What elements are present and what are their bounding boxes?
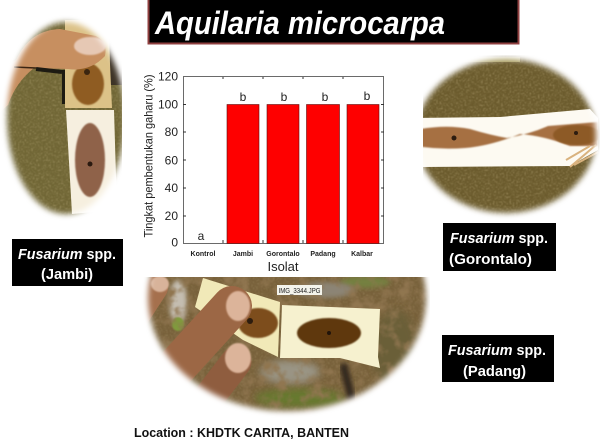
bar chart bbox=[142, 70, 384, 274]
label: Gorontalo bbox=[443, 223, 556, 271]
label: Jambi: (Jambi) bbox=[41, 266, 93, 283]
y axis numbers: 40 bbox=[165, 181, 178, 195]
y axis numbers: 120 bbox=[158, 70, 178, 84]
label: Gorontalo: Fusarium spp. bbox=[450, 230, 548, 247]
significance letters: b bbox=[364, 89, 371, 103]
significance letters: a bbox=[198, 229, 205, 243]
label: Padang: Fusarium spp. bbox=[448, 342, 546, 359]
label: Gorontalo: (Gorontalo) bbox=[449, 251, 532, 268]
y axis numbers: 80 bbox=[165, 125, 178, 139]
chart plot frame bbox=[184, 76, 384, 244]
label: Jambi bbox=[12, 239, 123, 286]
axis ticks bbox=[183, 77, 384, 243]
photo: Gorontalo sample bbox=[415, 55, 600, 220]
y axis title: Tingkat pembentukan gaharu (%) bbox=[142, 74, 156, 238]
photo filename tag bbox=[277, 285, 322, 295]
significance letters: b bbox=[322, 90, 329, 104]
photo: Jambi sample bbox=[0, 15, 125, 225]
location caption: Location : KHDTK CARITA, BANTEN bbox=[134, 425, 349, 440]
y axis numbers: 20 bbox=[165, 209, 178, 223]
label: Padang bbox=[442, 335, 554, 382]
y axis numbers: 100 bbox=[158, 98, 178, 112]
y axis numbers: 60 bbox=[165, 154, 178, 168]
category labels: Jambi bbox=[233, 251, 253, 258]
label: Jambi: Fusarium spp. bbox=[18, 246, 116, 263]
x axis title: Isolat bbox=[267, 259, 299, 274]
y axis numbers bbox=[158, 70, 178, 250]
title banner: Aquilaria microcarpa bbox=[154, 5, 445, 41]
photo filename tag: IMG_3344.JPG bbox=[278, 288, 320, 295]
category labels: Kalbar bbox=[351, 251, 373, 258]
label: Padang: (Padang) bbox=[463, 363, 526, 380]
category labels bbox=[191, 251, 373, 258]
y axis numbers: 0 bbox=[171, 236, 178, 250]
significance letters: b bbox=[240, 90, 247, 104]
bars bbox=[227, 104, 379, 244]
significance letters bbox=[198, 89, 371, 243]
category labels: Padang bbox=[310, 251, 336, 258]
photo: Padang sample bbox=[144, 277, 430, 416]
category labels: Gorontalo bbox=[266, 251, 300, 258]
significance letters: b bbox=[281, 90, 288, 104]
category labels: Kontrol bbox=[191, 251, 215, 258]
